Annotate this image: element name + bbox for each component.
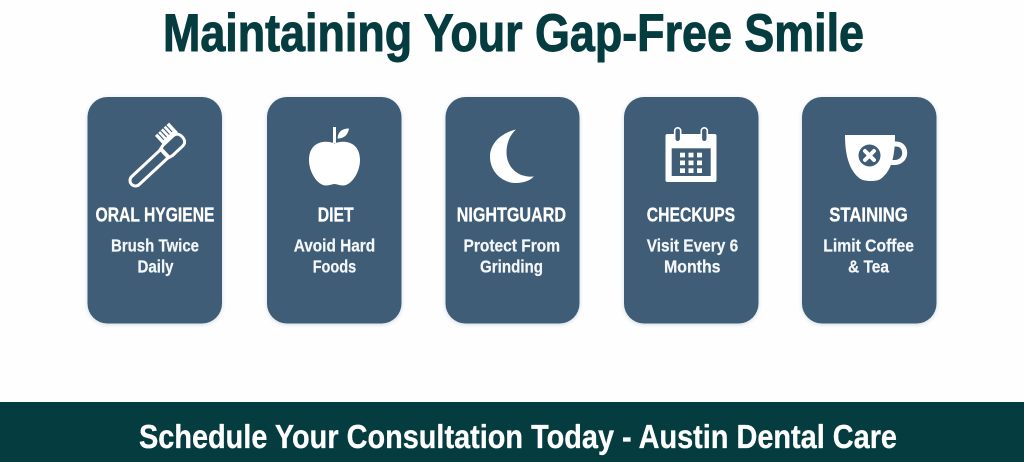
panel: diet [267,97,402,324]
panel: staining [802,97,936,324]
icon: crescent moon [490,130,534,183]
panel: oral hygiene [88,97,222,324]
text: brush twice daily: Brush Twice [111,236,199,256]
text: limit coffee and tea: & Tea [848,256,889,276]
icon: toothbrush [118,123,187,189]
text: visit every 6 months [647,236,738,276]
text: protect from grinding: Grinding [480,256,543,276]
footer banner [0,402,1024,462]
footer text: Schedule Your Consultation Today - Austin Dental Care [139,418,897,455]
panel: checkups [624,97,758,324]
text: limit coffee and tea [823,236,914,276]
text: avoid hard foods [294,236,375,276]
text: visit every 6 months: Months [664,256,721,276]
label: diet: DIET [318,204,354,226]
text: protect from grinding: Protect From [464,236,560,256]
panel: nightguard [446,97,580,324]
label: staining: STAINING [829,204,908,226]
icon: coffee cup with x [845,135,905,181]
text: protect from grinding [464,236,560,276]
text: avoid hard foods: Foods [313,256,356,276]
text: limit coffee and tea: Limit Coffee [823,236,914,256]
icon: apple [309,127,360,186]
title: Maintaining Your Gap-Free Smile [163,4,864,63]
label: oral hygiene: ORAL HYGIENE [96,204,214,226]
text: brush twice daily [111,236,199,276]
label: nightguard: NIGHTGUARD [457,204,566,226]
text: avoid hard foods: Avoid Hard [294,236,375,256]
icon: calendar [666,128,716,182]
label: checkups: CHECKUPS [647,204,735,226]
text: visit every 6 months: Visit Every 6 [647,236,738,256]
text: brush twice daily: Daily [138,256,174,276]
